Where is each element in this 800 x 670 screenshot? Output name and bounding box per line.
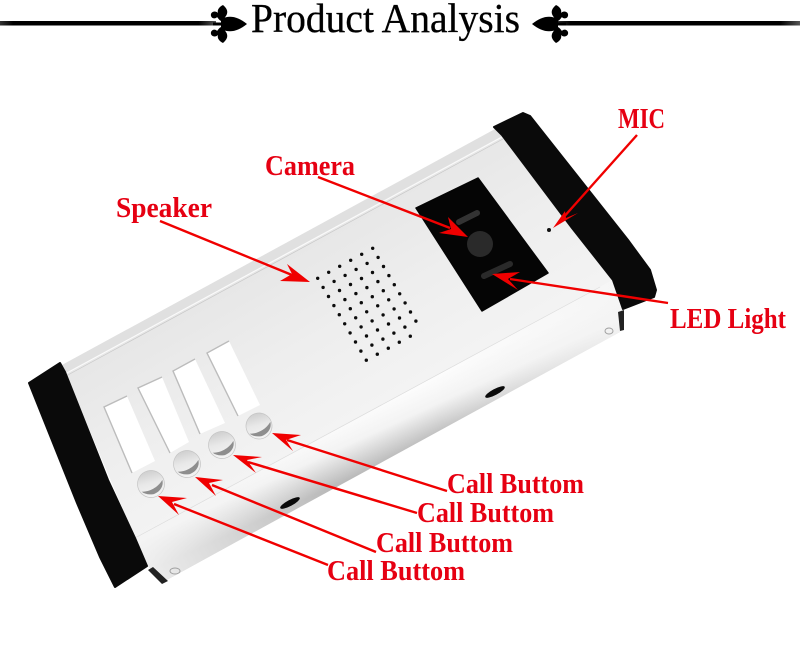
icon: right fleur ornament xyxy=(532,5,568,43)
arrow: call button 3 xyxy=(233,455,417,513)
LED slot xyxy=(484,264,510,276)
side keyholes xyxy=(279,384,506,511)
speaker grille xyxy=(318,248,416,360)
button 2 xyxy=(170,447,204,481)
intercom door panel device xyxy=(29,113,656,587)
device side face xyxy=(135,280,624,582)
label: Call Buttom 4: Call Buttom xyxy=(327,555,465,587)
arrow: LED Light xyxy=(492,272,668,303)
label: Call Buttom 3: Call Buttom xyxy=(376,527,513,559)
right black end cap xyxy=(494,113,656,309)
cap foot details xyxy=(148,567,168,584)
left black end cap xyxy=(29,363,147,587)
label: Call Buttom 1: Call Buttom xyxy=(447,468,584,500)
camera lens xyxy=(467,231,493,257)
arrow: call button 2 xyxy=(195,477,376,552)
annotation arrows xyxy=(158,135,668,565)
camera panel xyxy=(416,178,548,311)
callout labels xyxy=(116,103,786,587)
label: MIC: MIC xyxy=(618,103,665,135)
upper slot xyxy=(459,213,477,222)
button 3 xyxy=(205,428,239,462)
label: Call Buttom 2: Call Buttom xyxy=(417,497,554,529)
right divider line xyxy=(556,21,800,26)
left divider line xyxy=(0,21,216,26)
arrow: MIC xyxy=(553,135,637,228)
arrow: call button 4 xyxy=(272,433,447,491)
call buttons xyxy=(134,410,275,501)
arrow: Camera xyxy=(318,177,468,237)
corner screws xyxy=(170,328,613,574)
icon: left fleur ornament xyxy=(211,5,247,43)
name label windows xyxy=(104,341,260,473)
MIC hole xyxy=(547,228,551,232)
arrow: Speaker xyxy=(160,221,310,282)
header: Product Analysis xyxy=(0,0,800,43)
arrow: call button 1 xyxy=(158,496,328,565)
top rim strip xyxy=(62,128,502,373)
button 1 xyxy=(134,467,168,501)
label: Speaker: Speaker xyxy=(116,192,212,224)
crease line xyxy=(135,287,600,538)
device top face xyxy=(62,128,613,538)
button 4 xyxy=(243,410,275,442)
label: Camera: Camera xyxy=(265,150,355,182)
